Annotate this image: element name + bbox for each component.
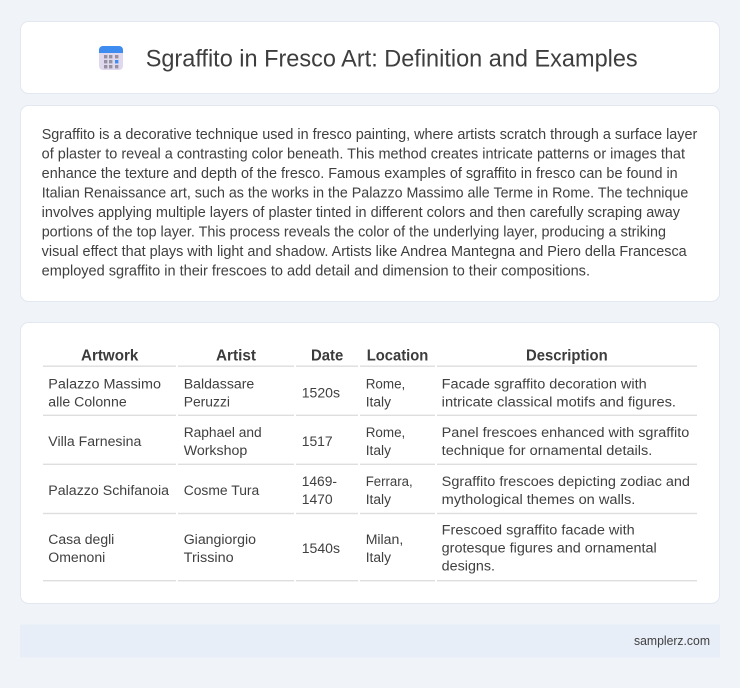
table row: Casa degli Omenoni: Milan, [366,532,403,548]
table row: Palazzo Schifanoia: Ferrara, [366,474,413,490]
panel: definition [20,106,720,302]
table row: Casa degli Omenoni: grotesque figures and ornamental [442,540,657,556]
table row: Villa Farnesina: Rome, [366,425,405,441]
text block: definition paragraph: enhance the texture and depth of the fresco. Famous examples of sgraffito in fresco can be found in [42,166,678,182]
table row: Villa Farnesina: Raphael and [184,425,262,441]
text block: definition paragraph: employed sgraffito in their frescoes to add detail and dimension to their compositions. [42,264,590,280]
footer bar [20,624,720,658]
table row: Casa degli Omenoni: Giangiorgio [184,532,256,548]
table row: Palazzo Schifanoia: Palazzo Schifanoia [48,483,169,499]
table row: Palazzo Schifanoia [48,474,690,508]
text block: definition paragraph: Italian Renaissance art, such as the works in the Palazzo Massimo alle Terme in Rome. The technique [42,186,688,202]
icon: calendar [99,46,123,70]
footer source text: samplerz.com [634,634,710,648]
table row: Palazzo Massimo alle Colonne: Baldassare [184,376,254,392]
table row: Palazzo Massimo alle Colonne: Palazzo Massimo [48,376,161,392]
table row: Palazzo Massimo alle Colonne [48,376,676,410]
table header [81,348,608,364]
table row: Palazzo Schifanoia: Cosme Tura [184,483,259,499]
table row: Villa Farnesina [48,425,689,459]
text block: definition paragraph [42,127,697,280]
table row: Villa Farnesina: Italy [366,443,392,459]
table row: Casa degli Omenoni: Omenoni [48,550,105,566]
table header: Artist [216,348,256,364]
table row: Casa degli Omenoni: designs. [442,558,495,574]
table row: Casa degli Omenoni: Casa degli [48,532,114,548]
table row: Villa Farnesina: technique for ornamental details. [442,443,652,459]
table row: Palazzo Massimo alle Colonne: intricate classical motifs and figures. [442,394,676,410]
table row: Palazzo Massimo alle Colonne: Peruzzi [184,394,230,410]
header panel [20,22,720,94]
table header: Artwork [81,348,139,364]
table row: Casa degli Omenoni: Trissino [184,550,234,566]
table row: Casa degli Omenoni [48,522,657,574]
table row: Palazzo Massimo alle Colonne: Italy [366,394,392,410]
table header: Location [367,348,428,364]
table row: Palazzo Schifanoia: Italy [366,492,392,508]
table row: Villa Farnesina: 1517 [302,434,333,450]
table row: Villa Farnesina: Workshop [184,443,247,459]
table header: Date [311,348,344,364]
table row: Casa degli Omenoni: 1540s [302,541,340,557]
table row: Palazzo Massimo alle Colonne: 1520s [302,386,340,402]
table row: Casa degli Omenoni: Frescoed sgraffito facade with [442,522,635,538]
table row: Palazzo Schifanoia: 1470 [302,492,333,508]
table row: Palazzo Massimo alle Colonne: Facade sgraffito decoration with [442,376,647,392]
panel: examples table [20,322,720,604]
text block: definition paragraph: portions of the top layer. This process reveals the color of the underlying layer, producing a striking [42,224,666,240]
text block: definition paragraph: involves applying multiple layers of plaster tinted in different colors and then carefully scraping away [42,205,681,221]
title: Sgraffito in Fresco Art: Definition and Examples [146,46,638,73]
table row: Palazzo Schifanoia: mythological themes on walls. [442,492,635,508]
table row: Palazzo Schifanoia: Sgraffito frescoes depicting zodiac and [442,474,690,490]
table row: Casa degli Omenoni: Italy [366,550,392,566]
text block: definition paragraph: of plaster to reveal a contrasting color beneath. This method creates intricate patterns or images that [42,146,685,162]
table row: Palazzo Massimo alle Colonne: Rome, [366,376,405,392]
table row: Palazzo Massimo alle Colonne: alle Colonne [48,394,127,410]
table header: Description [526,348,608,364]
text block: definition paragraph: visual effect that plays with light and shadow. Artists like Andrea Mantegna and Piero della Francesca [42,244,687,260]
text block: definition paragraph: Sgraffito is a decorative technique used in fresco painting, where artists scratch through a surface layer [42,127,697,143]
table row: Villa Farnesina: Panel frescoes enhanced with sgraffito [442,425,689,441]
table row: Palazzo Schifanoia: 1469- [302,474,337,490]
table row: Villa Farnesina: Villa Farnesina [48,434,141,450]
